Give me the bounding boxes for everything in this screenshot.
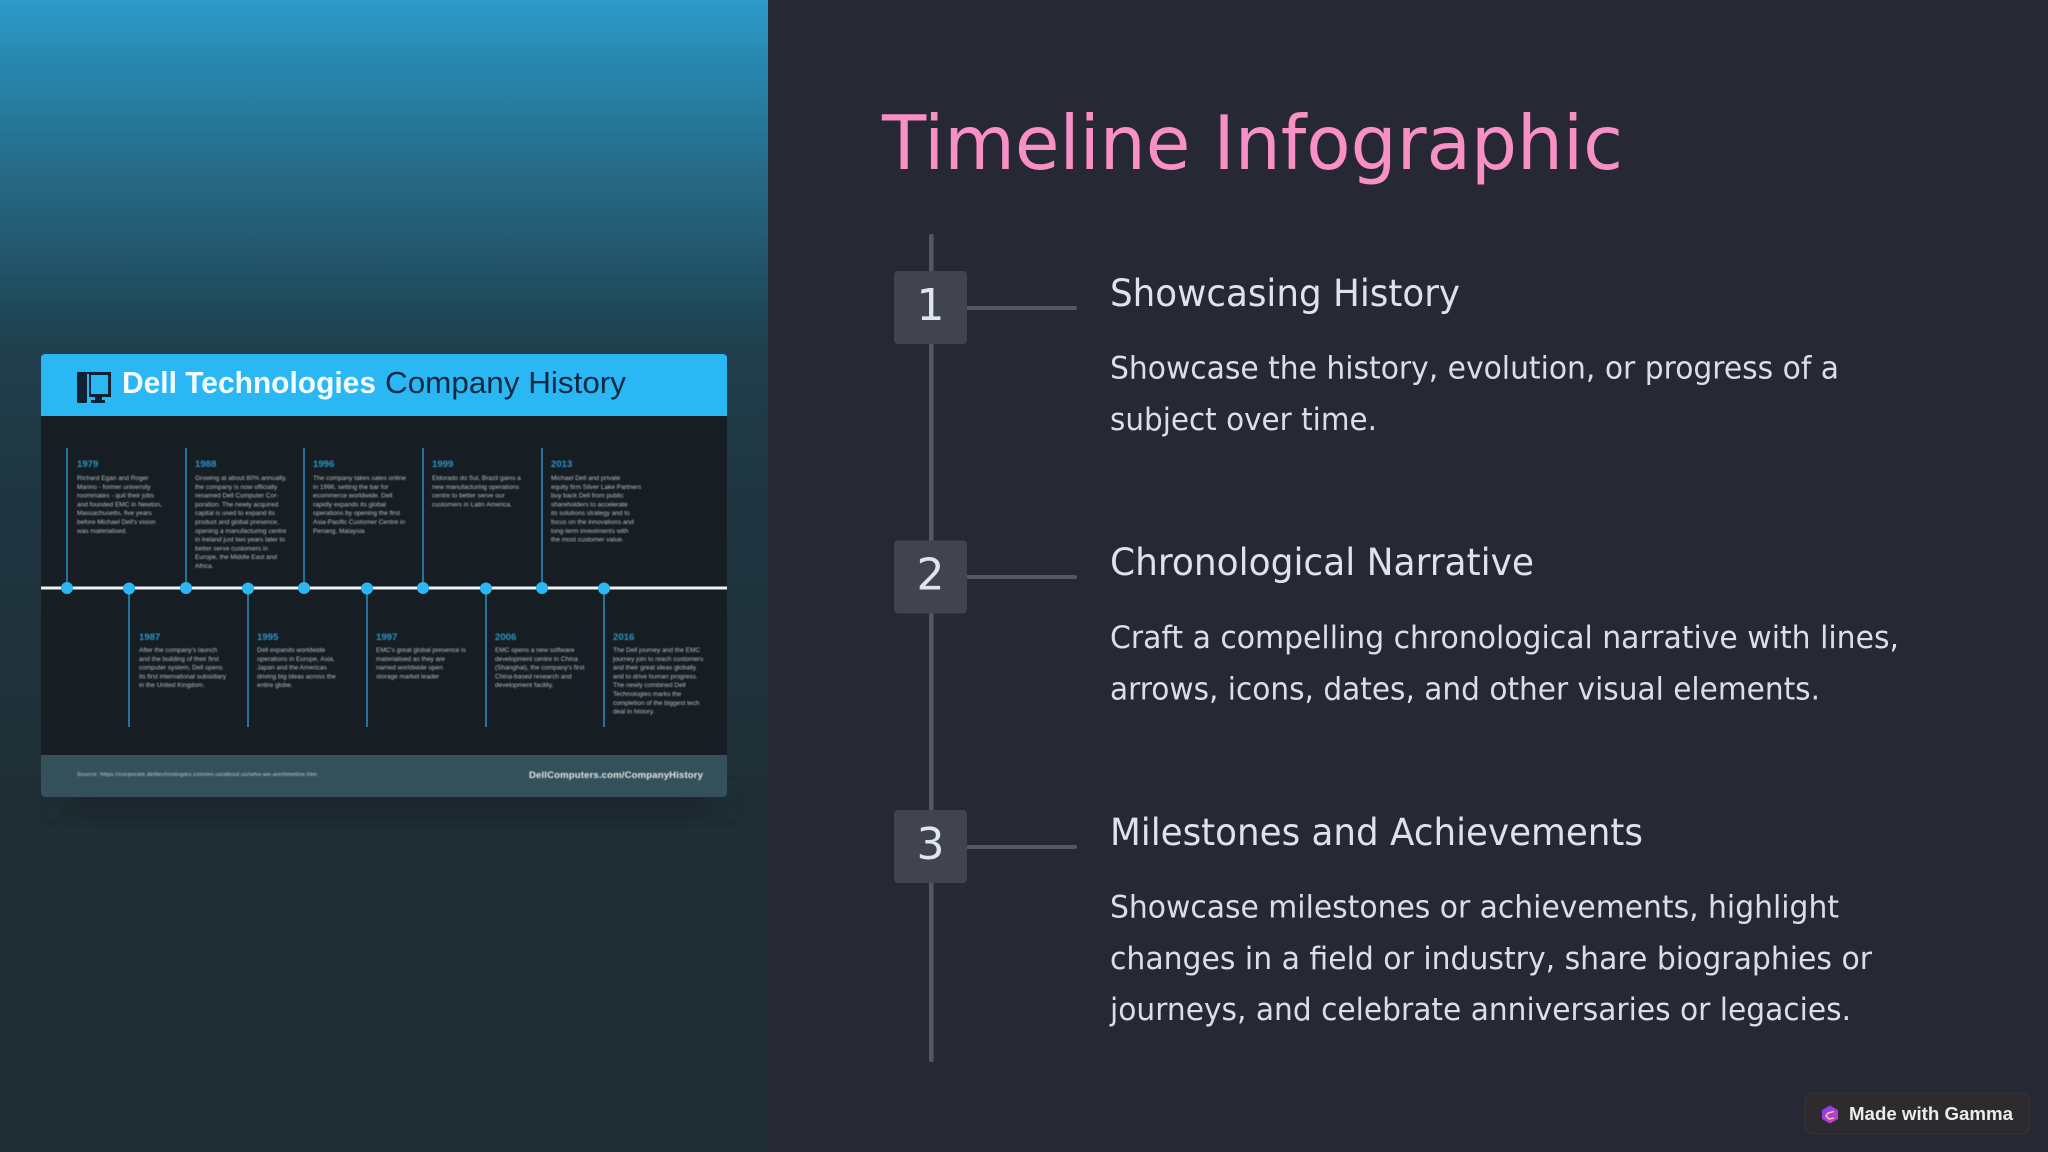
source note: Source: https://corporate.delltechnologies.com/en-us/about-us/who-we-are/timeline.htm (77, 772, 317, 778)
event 1988: the company is now officially (195, 484, 278, 491)
event 2006: development facility. (495, 682, 554, 689)
body 2: Craft a compelling chronological narrative with lines, (1110, 620, 1899, 656)
event 2013: 2013 (551, 459, 572, 470)
body 3: Showcase milestones or achievements, highlight (1110, 890, 1839, 926)
event 1988: better serve customers in (195, 545, 268, 552)
event 2013: focus on the innovations and (551, 519, 634, 526)
event 2006: EMC opens a new software (495, 647, 575, 654)
event 1999 (432, 459, 521, 508)
event 1996: in 1996, setting the bar for (313, 484, 389, 491)
event 2016: Technologies marks the (613, 691, 682, 698)
event 2016: deal in history. (613, 709, 655, 716)
number box 3: 3 (916, 819, 944, 870)
heading 1: Showcasing History (1110, 271, 1460, 315)
card title: Dell Technologies (122, 365, 376, 400)
event 1999: customers in Latin America. (432, 501, 512, 508)
icon: Gamma hexagon (1822, 1106, 1838, 1124)
event 1997: named worldwide open (376, 665, 443, 672)
event 2016: and to drive human progress. (613, 673, 698, 680)
event 1987: its first international subsidiary (139, 673, 227, 680)
event 1996: rapidly expands its global (313, 501, 387, 508)
panel: Dell Technologies company history timeline image (41, 354, 727, 797)
connector 3 (966, 845, 1077, 849)
card body (41, 354, 727, 797)
number box 2 (894, 540, 967, 614)
event 1995: driving big ideas across the (257, 673, 336, 680)
connector 1 (966, 306, 1077, 310)
event 1987 (139, 632, 227, 689)
event 2016 (612, 632, 704, 716)
timeline axis (41, 586, 727, 590)
event 1995: entire globe. (257, 682, 293, 689)
event 1988: capital is used to expand its (195, 510, 276, 517)
event 2013: long-term investments with (551, 528, 629, 535)
event 1987: 1987 (139, 632, 160, 643)
body 1 (1110, 350, 1839, 438)
event 1979 (76, 459, 162, 535)
event 1988: Growing at about 80% annually, (195, 475, 287, 482)
event 1979: and founded EMC in Newton, (77, 501, 162, 508)
event 1987: After the company's launch (139, 647, 218, 654)
event 1996: Asia-Pacific Customer Centre in (313, 519, 405, 526)
body 3: changes in a field or industry, share biographies or (1110, 941, 1872, 977)
event 1988: in Ireland just two years later to (195, 537, 285, 544)
panel: left image background (0, 0, 768, 1152)
event 2006: (Shanghai), the company's first (495, 665, 585, 672)
timeline dots (61, 582, 610, 594)
body 2: arrows, icons, dates, and other visual elements. (1110, 672, 1820, 708)
event 1979: 1979 (77, 459, 98, 470)
event 1988: 1988 (195, 459, 217, 470)
website link: DellComputers.com/CompanyHistory (529, 770, 704, 781)
event 2006: China-based research and (495, 673, 572, 680)
event 2013: shareholders to accelerate (551, 501, 628, 508)
heading 2: Chronological Narrative (1110, 540, 1534, 584)
step 3 (894, 810, 1872, 1028)
event 2016: The newly combined Dell (613, 682, 686, 689)
event 1997: storage market leader (376, 673, 440, 680)
card header band: Company History (385, 365, 626, 400)
event 1979: was materialised. (76, 528, 127, 535)
event 1999: 1999 (432, 459, 453, 470)
event 1995: operations in Europe, Asia, (257, 656, 335, 663)
number box 2: 2 (916, 550, 944, 600)
event 2013: its solutions strategy and to (551, 510, 630, 517)
card shadow (60, 780, 720, 820)
number box 1: 1 (916, 280, 944, 331)
event 1996: Penang, Malaysia (313, 528, 365, 535)
card footer band (41, 755, 727, 797)
timeline spine (929, 234, 934, 1062)
event 1996: 1996 (313, 459, 334, 470)
event 1979: roommates - quit their jobs (77, 493, 155, 500)
connector 2 (966, 575, 1077, 579)
event 2013: the most customer value. (551, 537, 624, 544)
event 1997: 1997 (376, 632, 397, 643)
event 1988: renamed Dell Computer Cor- (195, 493, 278, 500)
event texts (76, 459, 704, 716)
event 1995: Dell expands worldwide (257, 647, 326, 654)
event 1987: in the United Kingdom. (139, 682, 205, 689)
event 1996 (313, 459, 406, 535)
event 1987: and the building of their first (139, 656, 219, 663)
event 1995: Japan and the Americas (257, 665, 327, 672)
event 1988: Africa. (195, 563, 214, 570)
event 2013: buy back Dell from public (551, 493, 624, 500)
event 2006: 2006 (495, 632, 516, 643)
event 1988 (195, 459, 287, 570)
step 1 (894, 271, 1839, 438)
event 1995 (257, 632, 336, 689)
event 2006 (495, 632, 585, 689)
event 1988: Europe, the Middle East and (195, 554, 277, 561)
event 1996: operations by opening the first (313, 510, 400, 517)
event 1979: Marino - former university (77, 484, 151, 491)
event 1996: The company takes sales online (313, 475, 406, 482)
step 2 (894, 540, 1899, 708)
event 1997: EMC's great global presence is (376, 647, 467, 654)
event 2006: development centre in China (495, 656, 578, 663)
event 2013: equity firm Silver Lake Partners (551, 484, 642, 491)
event 2016: journey join to reach customers (612, 656, 704, 663)
event 1979: Richard Egan and Roger (77, 475, 149, 482)
event 2016: and their great ideas globally (613, 665, 697, 672)
card header band (41, 354, 727, 416)
body 1: Showcase the history, evolution, or progress of a (1110, 350, 1839, 386)
event 1995: 1995 (257, 632, 279, 643)
event 1997: materialised as they are (376, 656, 445, 663)
body 2 (1110, 620, 1899, 708)
event 1999: new manufacturing operations (432, 484, 520, 491)
event 1987: computer system, Dell opens (139, 665, 224, 672)
event 2016: completion of the biggest tech (613, 700, 700, 707)
event 1997 (376, 632, 467, 680)
body 3: journeys, and celebrate anniversaries or legacies. (1109, 992, 1851, 1028)
event 1988: poration. The newly acquired (195, 501, 279, 508)
main title: Timeline Infographic (881, 99, 1623, 187)
body 1: subject over time. (1110, 402, 1377, 438)
icon: desktop computer (77, 372, 111, 403)
event 1999: Eldorado do Sul, Brazil gains a (432, 475, 521, 482)
panel: right dark background (768, 0, 2048, 1152)
event 1979: before Michael Dell's vision (77, 519, 156, 526)
body 3 (1109, 890, 1872, 1028)
event 1979: Massachusetts, five years (77, 510, 153, 517)
number box 3 (894, 810, 967, 883)
event 2016: The Dell journey and the EMC (613, 647, 700, 654)
event 1988: opening a manufacturing centre (195, 528, 287, 535)
timeline stems (67, 448, 604, 727)
badge: Made with Gamma (1805, 1093, 2030, 1134)
number box 1 (894, 271, 967, 344)
event 1988: product and global presence, (195, 519, 279, 526)
heading 3: Milestones and Achievements (1110, 810, 1643, 854)
event 1996: ecommerce worldwide. Dell (313, 493, 393, 500)
event 1999: centre to better serve our (432, 493, 505, 500)
badge label: Made with Gamma (1849, 1103, 2014, 1124)
event 2013 (551, 459, 642, 544)
event 2013: Michael Dell and private (551, 475, 621, 482)
event 2016: 2016 (613, 632, 634, 643)
